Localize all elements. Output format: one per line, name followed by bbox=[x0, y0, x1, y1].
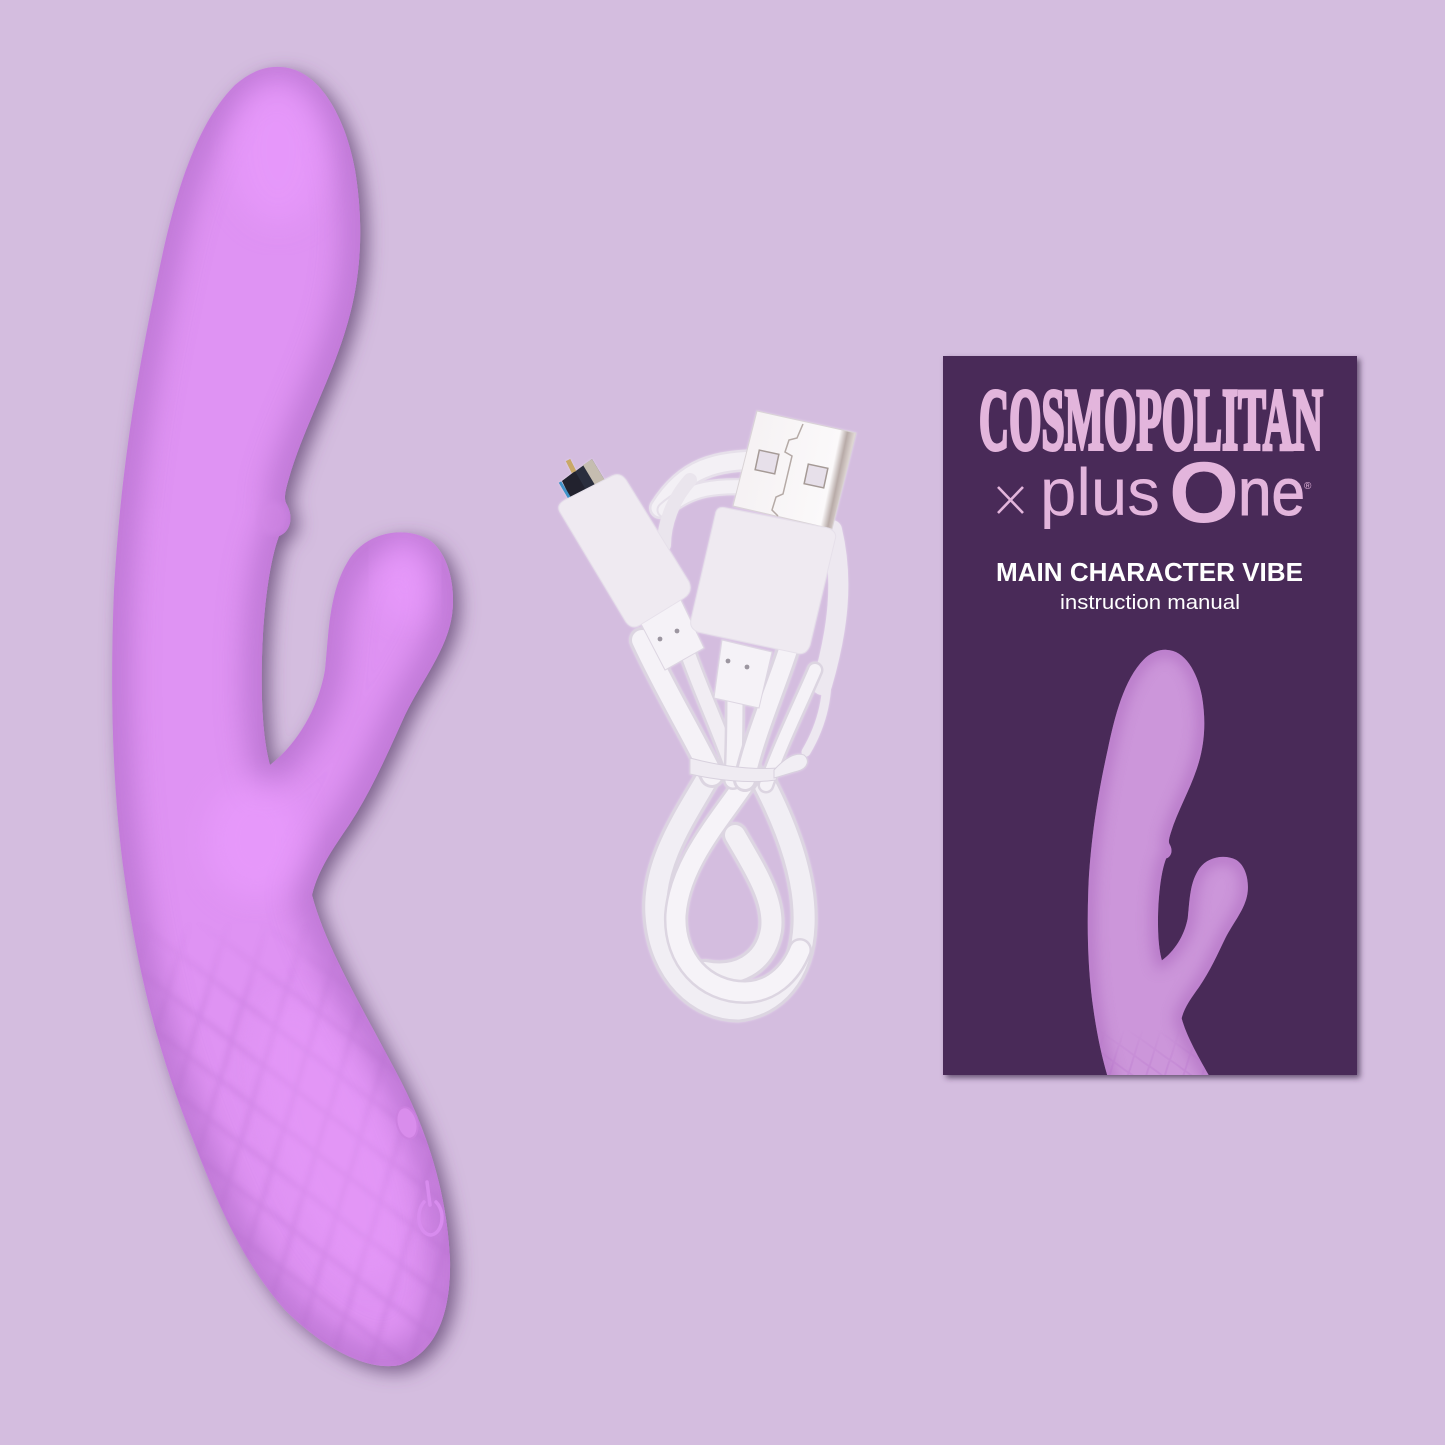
small plug strain relief bbox=[640, 598, 704, 670]
cable loops bbox=[656, 770, 804, 1009]
manual title: MAIN CHARACTER VIBE bbox=[996, 557, 1303, 587]
brand line: x plusOne: ne bbox=[1238, 455, 1305, 530]
panel: instruction manual bbox=[942, 354, 1364, 1082]
USB metal connector bbox=[733, 411, 856, 529]
small charging pin tip bbox=[560, 459, 607, 509]
USB strain relief bbox=[714, 640, 772, 708]
manual product image bbox=[1088, 650, 1248, 1075]
brand line: x plusOne: ® bbox=[1304, 481, 1312, 492]
cable upper strands bbox=[642, 640, 815, 785]
small nub shading bbox=[257, 501, 287, 535]
icon: round button bbox=[393, 1105, 421, 1141]
brand line: x plusOne: O bbox=[1169, 445, 1239, 541]
icon: power button bbox=[419, 1182, 442, 1235]
cable top loop bbox=[660, 460, 838, 752]
brand line: x plusOne: plus bbox=[1040, 455, 1160, 530]
brand line: x plusOne bbox=[998, 445, 1312, 541]
USB plug housing bbox=[691, 508, 836, 654]
manual subtitle: instruction manual bbox=[1060, 592, 1240, 614]
textured handle pattern bbox=[196, 990, 416, 1320]
product: main vibrator bbox=[100, 67, 500, 1380]
small plug housing bbox=[559, 475, 690, 627]
product: charging cable bbox=[559, 411, 856, 1009]
cable tie band bbox=[690, 754, 807, 782]
